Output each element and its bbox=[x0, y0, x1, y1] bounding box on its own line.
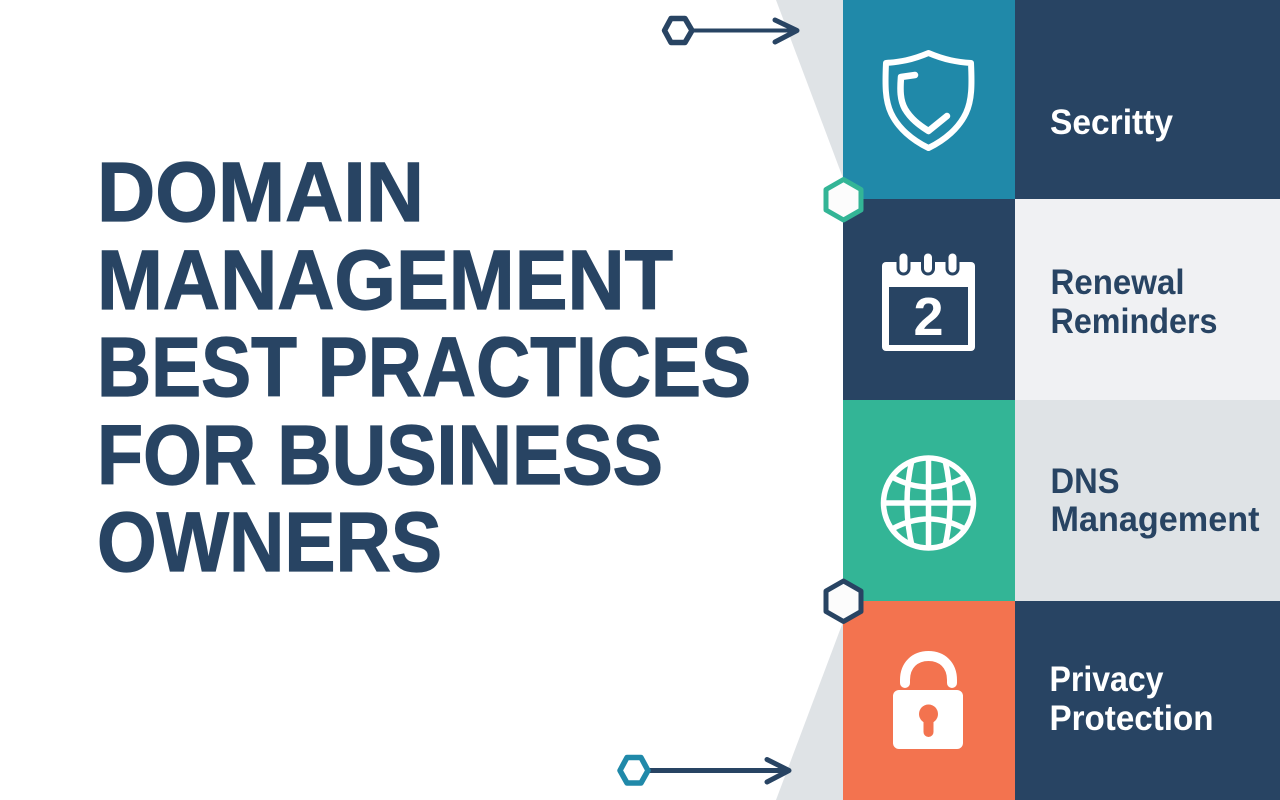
label: privacy protection: Privacy bbox=[1050, 660, 1164, 699]
icon: padlock bbox=[893, 656, 963, 749]
label tile: security bbox=[1015, 0, 1280, 199]
label tile: DNS bbox=[1015, 400, 1280, 601]
icon: shield bbox=[886, 53, 971, 148]
label: security: Secritty bbox=[1050, 103, 1174, 142]
label: renewal reminders: Reminders bbox=[1050, 302, 1218, 341]
label: renewal reminders bbox=[1050, 263, 1218, 341]
icon tile: renewal bbox=[843, 199, 1015, 400]
icon: calendar: 2 bbox=[913, 287, 944, 347]
panel: top grey wedge bbox=[776, 0, 843, 178]
arrow: bottom bbox=[620, 758, 789, 783]
panel: privacy protection row bbox=[843, 601, 1280, 800]
arrow: top bbox=[664, 18, 797, 42]
title: FOR BUSINESS bbox=[97, 408, 663, 502]
label: DNS management: Management bbox=[1050, 500, 1260, 539]
icon tile: privacy bbox=[843, 601, 1015, 800]
icon: navy hexagon node bbox=[826, 581, 861, 622]
panel: bottom grey wedge bbox=[776, 622, 843, 800]
panel: renewal reminders row bbox=[843, 199, 1280, 400]
label tile: privacy bbox=[1015, 601, 1280, 800]
title bbox=[97, 145, 751, 589]
panel: security row bbox=[843, 0, 1280, 199]
icon: globe bbox=[884, 458, 974, 548]
icon: green hexagon node bbox=[826, 180, 861, 220]
icon: calendar bbox=[882, 252, 975, 351]
icon tile: DNS bbox=[843, 400, 1015, 601]
label: DNS management bbox=[1050, 462, 1260, 539]
title: MANAGEMENT bbox=[97, 233, 673, 327]
label: renewal reminders: Renewal bbox=[1050, 263, 1184, 302]
label: DNS management: DNS bbox=[1050, 462, 1120, 501]
icon tile: security bbox=[843, 0, 1015, 199]
label: privacy protection: Protection bbox=[1050, 699, 1214, 738]
panel: DNS management row bbox=[843, 400, 1280, 601]
title: OWNERS bbox=[97, 495, 442, 589]
label tile: renewal bbox=[1015, 199, 1280, 400]
title: BEST PRACTICES bbox=[97, 320, 751, 414]
label: privacy protection bbox=[1050, 660, 1214, 738]
title: DOMAIN bbox=[97, 145, 424, 239]
